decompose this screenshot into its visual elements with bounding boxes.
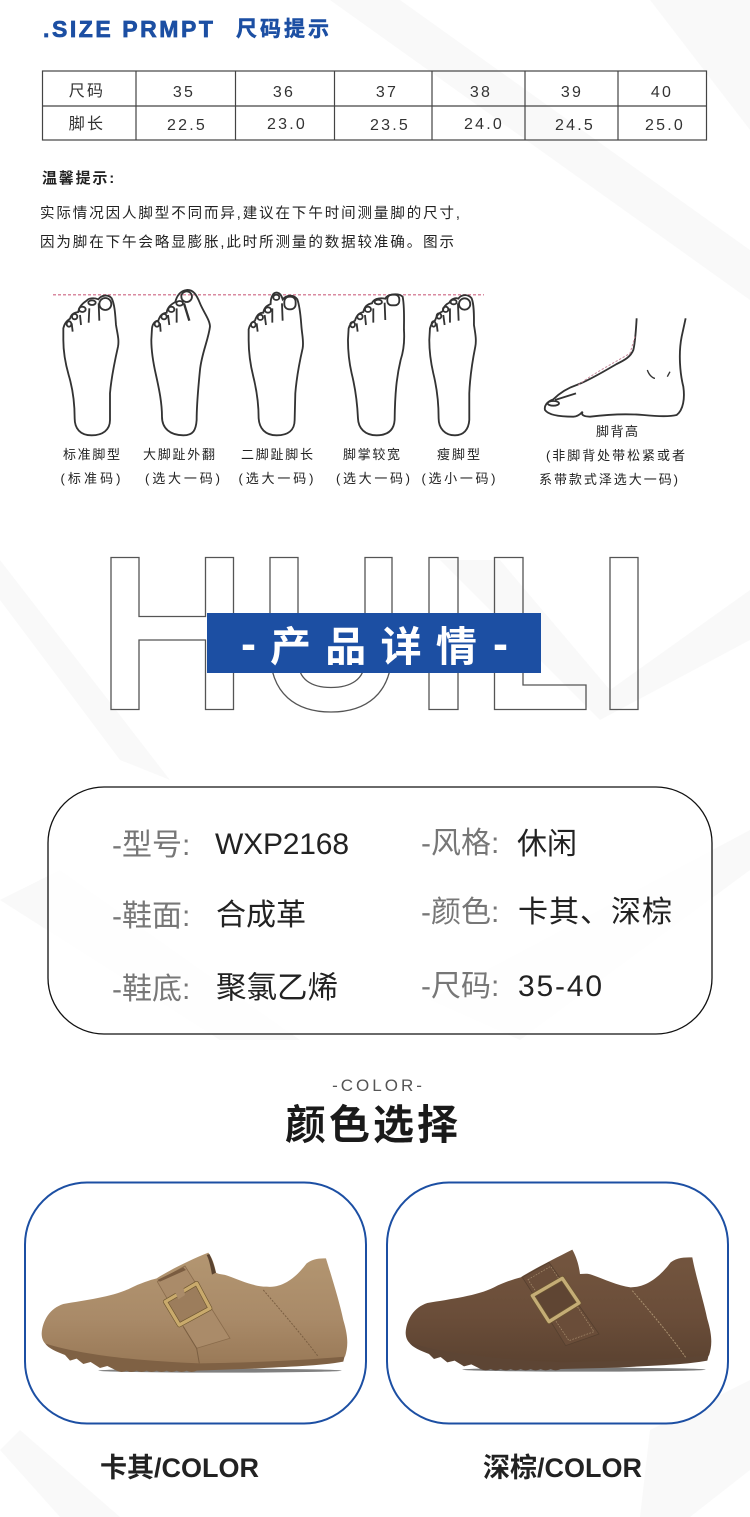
spec: upper: -鞋面: xyxy=(112,900,190,933)
foot type captions: (选大一码) xyxy=(336,471,410,486)
spec: colors: 卡其、深棕 xyxy=(518,896,673,929)
outlined HUILI lettering xyxy=(111,558,638,712)
heading: color selection xyxy=(285,1076,461,1148)
foot type captions: 瘦脚型 xyxy=(437,447,480,462)
banner: product details xyxy=(207,613,541,673)
icon: wide foot xyxy=(348,294,404,435)
icon: narrow foot xyxy=(429,295,476,435)
panel: product specs xyxy=(48,787,712,1034)
foot type captions xyxy=(60,424,685,487)
spec: model: -型号: xyxy=(112,829,190,862)
title: size prompt: 尺码提示 xyxy=(236,18,332,41)
spec: sizes: 35-40 xyxy=(518,970,602,1003)
heading: warm tip: 温馨提示: xyxy=(42,170,116,187)
khaki shoe illustration xyxy=(42,1253,347,1373)
spec: sizes: -尺码: xyxy=(421,970,499,1003)
size table: 37 xyxy=(376,84,398,101)
size table: 40 xyxy=(651,84,673,101)
label: khaki: 卡其/COLOR xyxy=(100,1453,259,1483)
dark brown shoe illustration xyxy=(406,1250,711,1372)
size table: 38 xyxy=(470,84,492,101)
spec: upper: 合成革 xyxy=(216,899,306,932)
foot type diagrams xyxy=(53,290,686,435)
card: khaki shoe xyxy=(25,1182,366,1424)
foot type captions: (选大一码) xyxy=(238,471,314,486)
spec: sole: 聚氯乙烯 xyxy=(216,971,338,1005)
size table xyxy=(42,71,706,140)
icon: side view of foot xyxy=(545,318,686,417)
foot type captions: 系带款式泽选大一码) xyxy=(539,472,678,487)
size table: 脚长 xyxy=(69,115,105,133)
size table: 23.5 xyxy=(370,117,410,134)
spec: model: WXP2168 xyxy=(215,828,349,861)
foot type captions: 脚背高 xyxy=(596,424,638,439)
foot type captions: 大脚趾外翻 xyxy=(143,447,215,462)
size table: 35 xyxy=(173,84,195,101)
card: dark brown shoe xyxy=(387,1182,728,1424)
measuring line xyxy=(53,294,484,296)
icon: long second toe foot xyxy=(249,293,303,435)
banner: product details: - xyxy=(241,618,256,669)
title: size prompt: .SIZE PRMPT xyxy=(43,16,215,42)
spec: colors: -颜色: xyxy=(421,896,499,929)
size table: 36 xyxy=(273,84,295,101)
icon: bunion foot xyxy=(151,290,210,435)
banner: product details: - xyxy=(493,618,508,669)
spec: colors xyxy=(421,896,673,929)
spec: style xyxy=(421,827,577,861)
heading: color selection: -COLOR- xyxy=(332,1076,425,1095)
spec: upper xyxy=(112,899,306,933)
spec: sole xyxy=(112,971,338,1006)
size table: 24.0 xyxy=(464,116,504,133)
size table: 25.0 xyxy=(645,117,685,134)
spec: model xyxy=(112,828,349,862)
banner: product details: 产品详情 xyxy=(270,624,491,670)
size table: 39 xyxy=(561,84,583,101)
tip paragraph: 因为脚在下午会略显膨胀,此时所测量的数据较准确。图示 xyxy=(40,233,456,251)
foot type captions: (选大一码) xyxy=(145,471,220,486)
foot type captions: 二脚趾脚长 xyxy=(241,447,313,462)
spec: sizes xyxy=(421,970,602,1003)
foot type captions: (非脚背处带松紧或者 xyxy=(546,448,685,463)
foot type captions: 脚掌较宽 xyxy=(343,447,400,462)
spec: style: 休闲 xyxy=(517,828,577,861)
tip paragraph: 实际情况因人脚型不同而异,建议在下午时间测量脚的尺寸, xyxy=(40,205,462,222)
tip paragraph xyxy=(40,205,462,251)
size table: 尺码 xyxy=(69,82,105,100)
icon: standard foot xyxy=(63,296,118,435)
foot type captions: (标准码) xyxy=(60,471,120,486)
spec: sole: -鞋底: xyxy=(112,973,190,1006)
heading: color selection: 颜色选择 xyxy=(285,1102,461,1148)
label: dark brown: 深棕/COLOR xyxy=(483,1453,642,1483)
foot type captions: (选小一码) xyxy=(422,471,496,486)
size table: 23.0 xyxy=(267,116,307,133)
size table: 22.5 xyxy=(167,117,207,134)
foot type captions: 标准脚型 xyxy=(63,447,120,462)
size table: 24.5 xyxy=(555,117,595,134)
spec: style: -风格: xyxy=(421,827,499,860)
title: size prompt xyxy=(43,16,332,42)
